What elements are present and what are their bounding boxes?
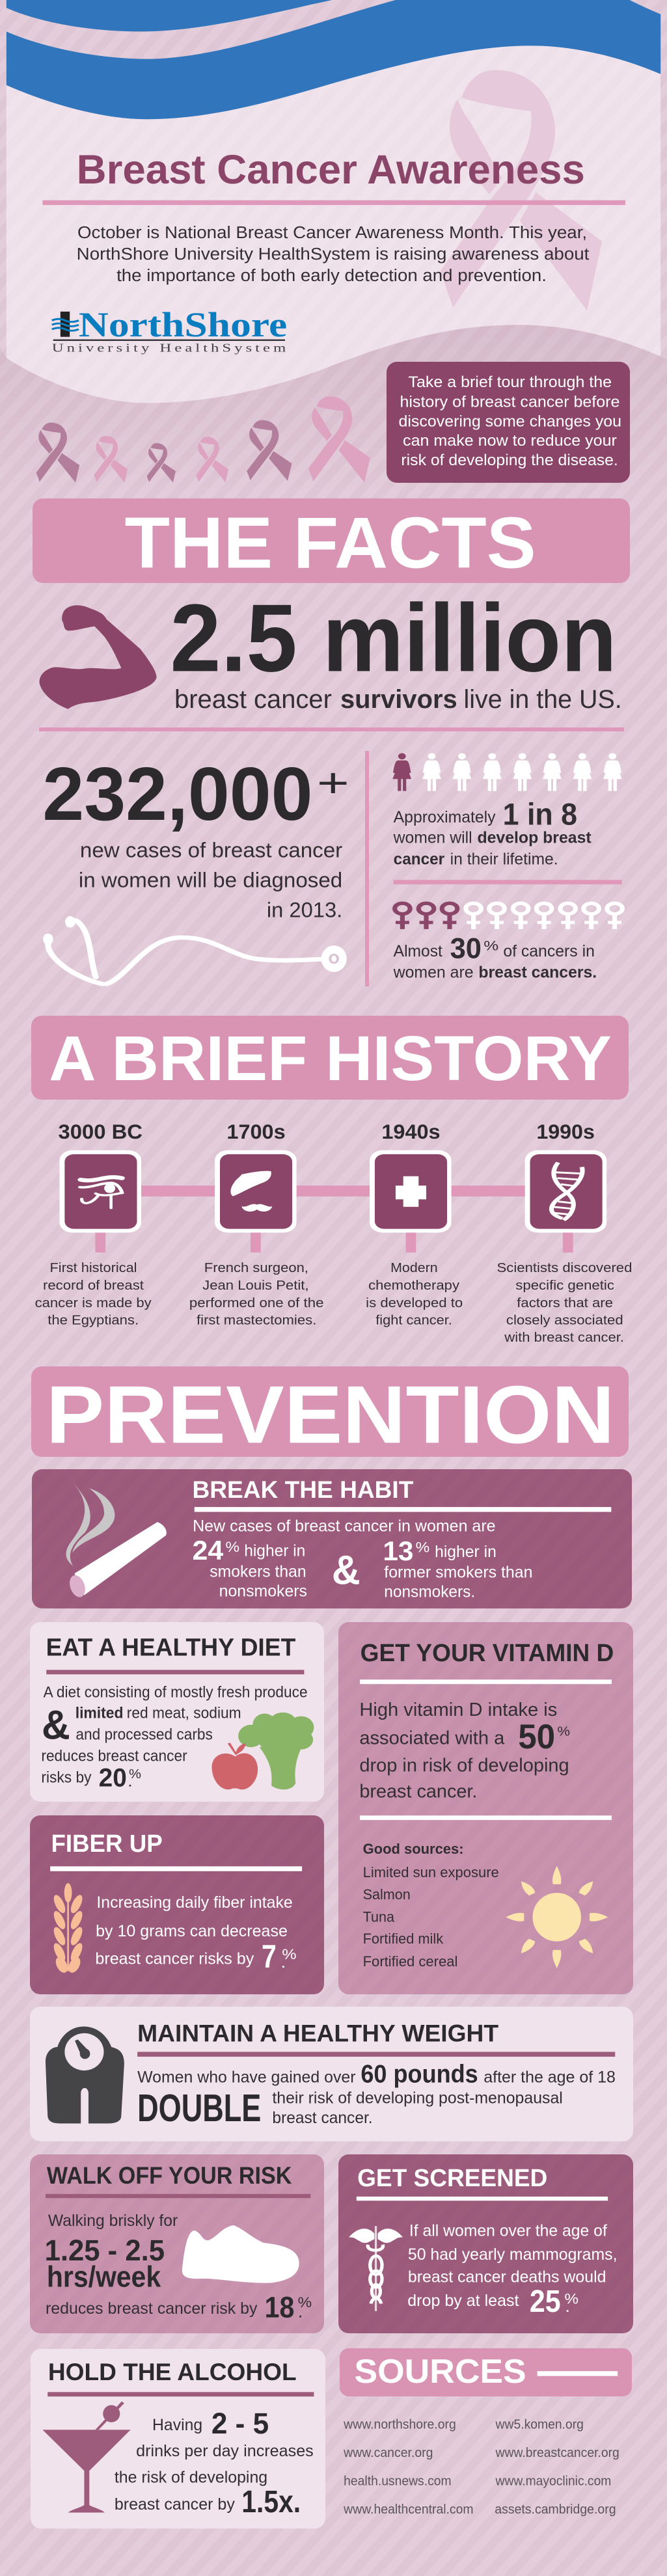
panel: break the habit: BREAK THE HABIT (192, 1476, 413, 1503)
icon: flexed arm (40, 605, 157, 709)
panel: get screened: GET SCREENED (357, 2163, 547, 2191)
intro paragraph: the importance of both early detection and prevention. (116, 265, 547, 285)
panel: vitamin D: 50 (518, 1717, 555, 1756)
panel: fiber up: % (282, 1947, 297, 1962)
stat: 30% of cancers (393, 932, 597, 981)
stat: 1 in 8 women (393, 797, 622, 884)
stat: 232,000+ new cases: in 2013. (267, 899, 342, 922)
stat: 232,000+ new cases: in women will be diagnosed (79, 869, 342, 892)
NorthShore logo: University HealthSystem (52, 341, 286, 355)
icon: beret and moustache (230, 1171, 272, 1212)
panel: vitamin D: High vitamin D intake is (359, 1699, 557, 1720)
stat: 30% of cancers: % (483, 938, 498, 953)
sources list: assets.cambridge.org (495, 2502, 616, 2517)
icon: cigarette (66, 1479, 167, 1599)
panel: get screened: breast cancer deaths would (408, 2268, 606, 2286)
panel: vitamin D: Fortified cereal (363, 1954, 457, 1970)
sources list: www.healthcentral.com (343, 2502, 474, 2517)
timeline descriptions: First historical (49, 1260, 137, 1275)
panel: hold the alcohol: breast cancer by (115, 2495, 235, 2513)
small ribbons row (36, 396, 370, 483)
icon: medical cross (396, 1176, 426, 1207)
timeline descriptions: first mastectomies. (197, 1312, 316, 1327)
timeline descriptions: fight cancer. (375, 1312, 452, 1327)
panel: eat a healthy diet: & (42, 1703, 70, 1748)
panel: walk off your risk: 18 (265, 2291, 294, 2324)
stat: 1 in 8 women: cancer (394, 850, 444, 868)
timeline: 1990s: 1990s (536, 1121, 595, 1143)
icon: eye of Horus (80, 1177, 122, 1208)
panel: break the habit: 24 (192, 1536, 224, 1566)
panel: get screened: 25 (530, 2283, 561, 2318)
panel: the facts heading: THE FACTS (125, 502, 536, 584)
timeline: 3000 BC: 3000 BC (59, 1121, 143, 1143)
icon: stethoscope (43, 916, 347, 984)
panel: get screened (338, 2154, 633, 2333)
panel: walk off your risk: WALK OFF YOUR RISK (47, 2162, 292, 2189)
panel: eat a healthy diet: red meat, sodium (127, 1705, 241, 1722)
timeline descriptions: the Egyptians. (48, 1312, 139, 1327)
panel: vitamin D: Limited sun exposure (363, 1864, 499, 1880)
timeline: 3000 BC (59, 1121, 143, 1232)
stat: 30% of cancers: 30 (450, 932, 482, 965)
sources list (343, 2417, 619, 2517)
stat: 30% of cancers: women are (393, 964, 474, 981)
panel: eat a healthy diet: % (129, 1766, 141, 1782)
stat: 1 in 8 women: in their lifetime. (450, 850, 558, 868)
stat: 30% of cancers: Almost (394, 942, 442, 960)
panel: vitamin D: % (557, 1724, 570, 1739)
panel: fiber up: FIBER UP (51, 1829, 163, 1857)
panel: get screened: If all women over the age of (409, 2221, 607, 2240)
callout: brief tour: Take a brief tour through the (409, 373, 612, 391)
icon: sneaker (182, 2225, 299, 2283)
intro paragraph (77, 223, 590, 285)
timeline descriptions: factors that are (517, 1295, 613, 1310)
panel: break the habit: smokers than (210, 1562, 306, 1580)
large background ribbon (441, 70, 602, 310)
panel: hold the alcohol: 1.5x. (241, 2484, 301, 2519)
panel: vitamin D: Fortified milk (363, 1931, 443, 1947)
panel: get screened: . (565, 2298, 570, 2316)
panel: vitamin D: drop in risk of developing (359, 1754, 569, 1776)
panel: eat a healthy diet: EAT A HEALTHY DIET (46, 1633, 296, 1661)
panel: eat a healthy diet (30, 1622, 324, 1802)
sources list: www.mayoclinic.com (495, 2474, 611, 2488)
icon: caduceus (349, 2226, 403, 2311)
timeline: 1700s (215, 1121, 297, 1232)
timeline descriptions: specific genetic (515, 1277, 614, 1293)
panel: walk off your risk: 1.25 - 2.5 (45, 2234, 165, 2267)
panel: maintain a healthy weight: their risk of developing post-menopausal (272, 2089, 563, 2107)
timeline descriptions: record of breast (43, 1277, 144, 1293)
stat: 2.5 million survivors: survivors (340, 685, 457, 714)
panel: break the habit: % (416, 1539, 429, 1555)
panel: maintain a healthy weight: MAINTAIN A HEALTHY WEIGHT (137, 2020, 498, 2047)
panel: eat a healthy diet: and processed carbs (75, 1726, 213, 1743)
panel: maintain a healthy weight: Women who have gained over (137, 2068, 356, 2086)
timeline: 1700s: 1700s (226, 1121, 286, 1143)
panel: break the habit (32, 1469, 632, 1608)
panel: sources heading: SOURCES (355, 2352, 526, 2390)
sources list: www.northshore.org (343, 2417, 456, 2432)
timeline descriptions: French surgeon, (204, 1260, 308, 1275)
panel: sources heading (340, 2348, 632, 2396)
icon: apple (212, 1742, 258, 1789)
icon: DNA helix (551, 1163, 582, 1220)
panel: get screened: 50 had yearly mammograms, (408, 2245, 618, 2263)
panel: break the habit: New cases of breast cancer in women are (193, 1517, 496, 1535)
stat: 30% of cancers: of cancers in (503, 942, 595, 960)
panel: fiber up: 7 (262, 1938, 277, 1975)
panel: walk off your risk: . (298, 2303, 303, 2321)
panel: hold the alcohol: the risk of developing (115, 2468, 267, 2486)
timeline descriptions: Modern (390, 1260, 438, 1275)
panel: maintain a healthy weight: 60 pounds (361, 2059, 478, 2088)
timeline descriptions: Jean Louis Petit, (202, 1277, 309, 1293)
icon: bathroom scale (46, 2026, 124, 2124)
panel: break the habit: 13 (383, 1537, 413, 1567)
timeline: 1940s: 1940s (381, 1121, 441, 1143)
sources list: ww5.komen.org (495, 2417, 584, 2432)
panel: hold the alcohol (31, 2349, 325, 2529)
icon row: eight women (392, 753, 622, 791)
sources list: www.cancer.org (343, 2445, 433, 2460)
NorthShore logo (52, 305, 287, 355)
panel: maintain a healthy weight (30, 2007, 633, 2141)
panel: vitamin D: breast cancer. (359, 1781, 477, 1802)
panel: maintain a healthy weight: DOUBLE (137, 2086, 261, 2130)
panel: eat a healthy diet: reduces breast cancer (41, 1748, 187, 1765)
panel: get screened: % (564, 2291, 579, 2307)
stat: 2.5 million survivors: breast cancer (174, 685, 332, 714)
panel: fiber up: Increasing daily fiber intake (96, 1893, 293, 1912)
panel: eat a healthy diet: 20 (99, 1763, 127, 1793)
panel: walk off your risk: hrs/week (47, 2260, 161, 2294)
stat: 232,000+ new cases: + (317, 759, 349, 806)
timeline (59, 1121, 606, 1253)
sources list: health.usnews.com (344, 2474, 452, 2488)
panel: hold the alcohol: 2 - 5 (211, 2407, 269, 2440)
panel: vitamin D: Good sources: (363, 1841, 464, 1856)
stat: 30% of cancers: breast cancers. (478, 964, 597, 981)
panel: eat a healthy diet: limited (75, 1705, 124, 1722)
panel: break the habit: higher in (435, 1543, 497, 1561)
panel: break the habit: & (332, 1547, 361, 1593)
timeline descriptions: cancer is made by (35, 1295, 152, 1310)
timeline descriptions: chemotherapy (368, 1277, 459, 1293)
stat: 1 in 8 women: develop breast (477, 829, 592, 847)
stat: 1 in 8 women: 1 in 8 (503, 797, 577, 832)
icon: martini glass (42, 2402, 131, 2512)
stat: 232,000+ new cases: new cases of breast cancer (80, 839, 343, 862)
panel: fiber up (30, 1815, 324, 1994)
timeline descriptions: is developed to (366, 1295, 463, 1310)
panel: eat a healthy diet: risks by (41, 1769, 92, 1786)
panel: hold the alcohol: Having (152, 2415, 202, 2434)
panel: eat a healthy diet: . (128, 1773, 133, 1790)
stat: 1 in 8 women: Approximately (394, 808, 496, 826)
panel: walk off your risk: reduces breast cancer risk by (46, 2299, 258, 2317)
panel: walk off your risk (30, 2154, 324, 2333)
shaded ground under header wave (0, 325, 667, 393)
panel: fiber up: . (280, 1953, 286, 1971)
sources list: www.breastcancer.org (495, 2445, 619, 2460)
callout: brief tour (387, 362, 630, 483)
panel: fiber up: by 10 grams can decrease (96, 1922, 288, 1940)
panel: vitamin D: Salmon (363, 1886, 411, 1902)
stat: 232,000+ new cases: 232,000 (42, 752, 312, 836)
panel: walk off your risk: Walking briskly for (48, 2212, 178, 2230)
timeline: 1990s (525, 1121, 606, 1232)
panel: vitamin D: Tuna (363, 1909, 394, 1925)
panel: maintain a healthy weight: breast cancer. (272, 2109, 373, 2127)
icon: wheat (51, 1883, 85, 1974)
panel: vitamin D: GET YOUR VITAMIN D (361, 1639, 614, 1667)
panel: walk off your risk: % (298, 2295, 312, 2311)
panel: break the habit: nonsmokers. (384, 1582, 475, 1601)
timeline descriptions (35, 1260, 632, 1345)
panel: get screened: drop by at least (407, 2291, 519, 2309)
panel: prevention heading: PREVENTION (46, 1369, 615, 1460)
stat: 232,000+ new cases (42, 752, 349, 922)
panel: break the habit: % (225, 1539, 239, 1555)
icon row: female symbols (395, 903, 622, 929)
panel: hold the alcohol: HOLD THE ALCOHOL (48, 2359, 297, 2385)
panel: break the habit: former smokers than (384, 1563, 532, 1581)
panel: fiber up: breast cancer risks by (95, 1949, 254, 1968)
title (42, 146, 625, 205)
panel: eat a healthy diet: A diet consisting of mostly fresh produce (44, 1684, 308, 1701)
blue wave bands (7, 0, 660, 119)
timeline descriptions: performed one of the (189, 1295, 323, 1310)
panel: vitamin D (338, 1622, 633, 1994)
panel: vitamin D: associated with a (359, 1727, 505, 1748)
NorthShore logo: NorthShore (79, 305, 287, 344)
panel: break the habit: nonsmokers (219, 1582, 307, 1600)
header light wave panel (7, 46, 661, 403)
panel: maintain a healthy weight: after the age of 18 (483, 2068, 616, 2086)
panel: break the habit: higher in (244, 1541, 305, 1560)
timeline: 1940s (370, 1121, 452, 1232)
panel: hold the alcohol: drinks per day increases (136, 2442, 314, 2460)
stat: 1 in 8 women: women will (393, 829, 472, 847)
icon: broccoli (238, 1713, 314, 1789)
icon: sun (506, 1866, 608, 1968)
